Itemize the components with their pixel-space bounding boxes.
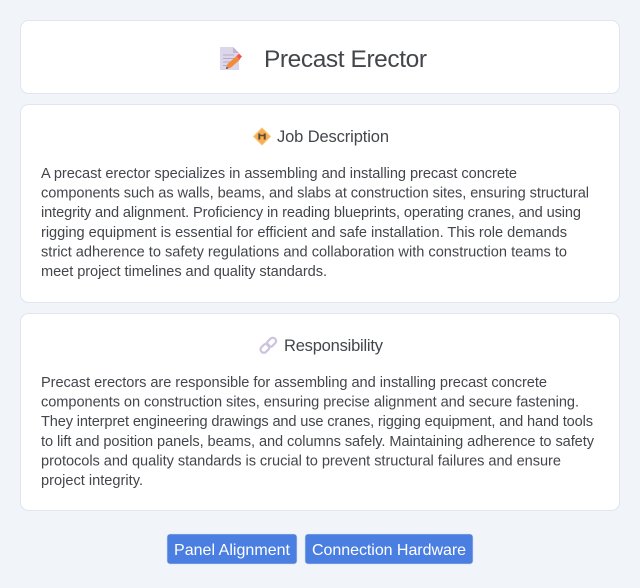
text block: job description: A precast erector specializes in assembling and installing precast concrete: [41, 166, 517, 182]
icon: orange road-sign diamond: [254, 128, 270, 145]
text block: responsibility: Precast erectors are responsible for assembling and installing precast concrete: [41, 375, 547, 391]
heading: responsibility: Responsibility: [284, 337, 384, 355]
text block: job description: strict adherence to safety regulations and collaboration with construction teams to: [41, 244, 567, 260]
title: Precast Erector: [264, 46, 427, 73]
text block: responsibility: protocols and quality standards is crucial to prevent structural failures and ensure: [41, 453, 561, 469]
tag: connection hardware: Connection Hardware: [312, 542, 466, 559]
text block: job description: components such as walls, beams, and slabs at construction sites, ensuring structural: [41, 186, 589, 202]
text block: job description: [41, 166, 589, 280]
text block: responsibility: components on construction sites, ensuring precise alignment and secure fastening.: [41, 395, 579, 411]
tag: panel alignment: Panel Alignment: [174, 542, 291, 559]
text block: job description: integrity and alignment. Proficiency in reading blueprints, operating cranes, and using: [41, 205, 581, 221]
panel: job description: [20, 104, 620, 302]
text block: responsibility: to lift and position panels, beams, and columns safely. Maintaining adherence to safety: [41, 434, 595, 450]
text block: responsibility: [41, 375, 595, 489]
heading: job description: Job Description: [277, 128, 389, 146]
panel: responsibility: [20, 314, 620, 510]
tag: connection hardware: [305, 534, 473, 564]
text block: responsibility: project integrity.: [41, 473, 143, 489]
text block: job description: meet project timelines and quality standards.: [41, 264, 327, 280]
text block: responsibility: They interpret engineering drawings and use cranes, rigging equipment, and hand tools: [41, 414, 593, 430]
icon: document with pencil: [220, 47, 242, 70]
panel: title card: [20, 20, 620, 94]
tag: panel alignment: [167, 534, 297, 564]
icon: chain link: [259, 336, 277, 354]
text block: job description: rigging equipment is essential for efficient and safe installation. This role demands: [41, 225, 567, 241]
